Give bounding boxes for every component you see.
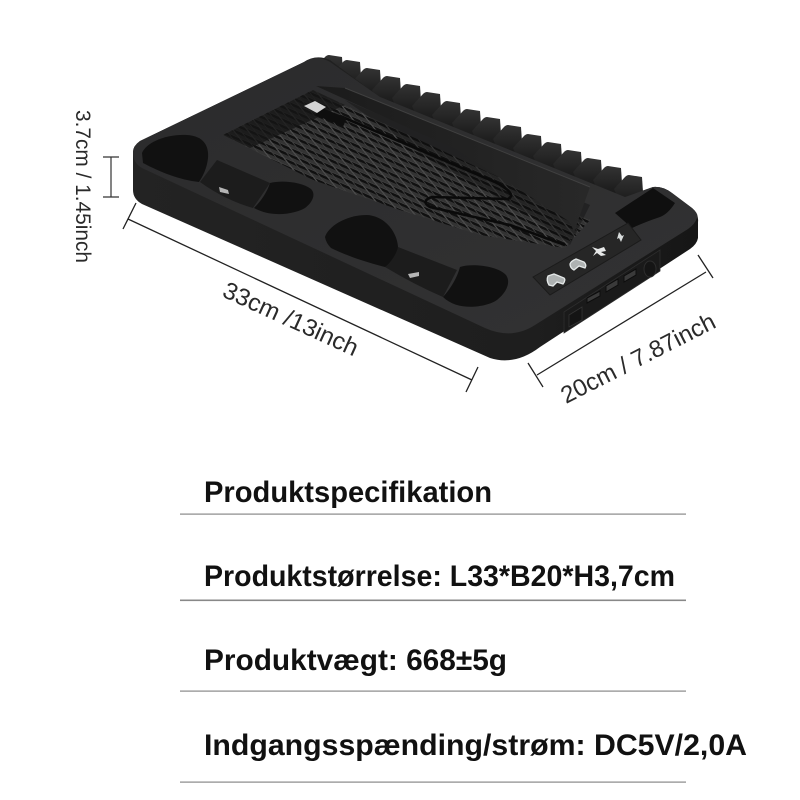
right controller pockets [325,215,508,307]
icon: controller 2 [570,259,586,270]
stand body side [133,57,698,360]
height dimension [71,110,119,263]
spec: product size: Produktstørrelse: L33*B20*H3,7cm [204,560,675,593]
product: charging stand [133,55,698,360]
width dimension [528,255,720,409]
specification heading: Produktspecifikation [204,476,492,509]
ventilation mesh [223,90,590,248]
height dimension: 3.7cm / 1.45inch [71,110,94,263]
icon: fan [592,247,606,256]
storage pocket [615,188,675,228]
raised cable bar [316,86,590,232]
icon: lightning [617,232,624,242]
spec: input voltage: Indgangsspænding/strøm: DC5V/2,0A [204,729,747,762]
length dimension [123,203,478,392]
spec: product weight: Produktvægt: 668±5g [204,644,507,677]
icon: controller 1 [547,274,565,286]
length dimension: 33cm /13inch [219,277,363,362]
stand top surface [133,58,697,333]
front ports panel [564,250,660,333]
USB cable [304,101,565,245]
LED indicator panel [533,223,641,295]
left controller pockets [142,135,313,214]
cooling fins [314,55,644,207]
width dimension: 20cm / 7.87inch [556,308,720,409]
